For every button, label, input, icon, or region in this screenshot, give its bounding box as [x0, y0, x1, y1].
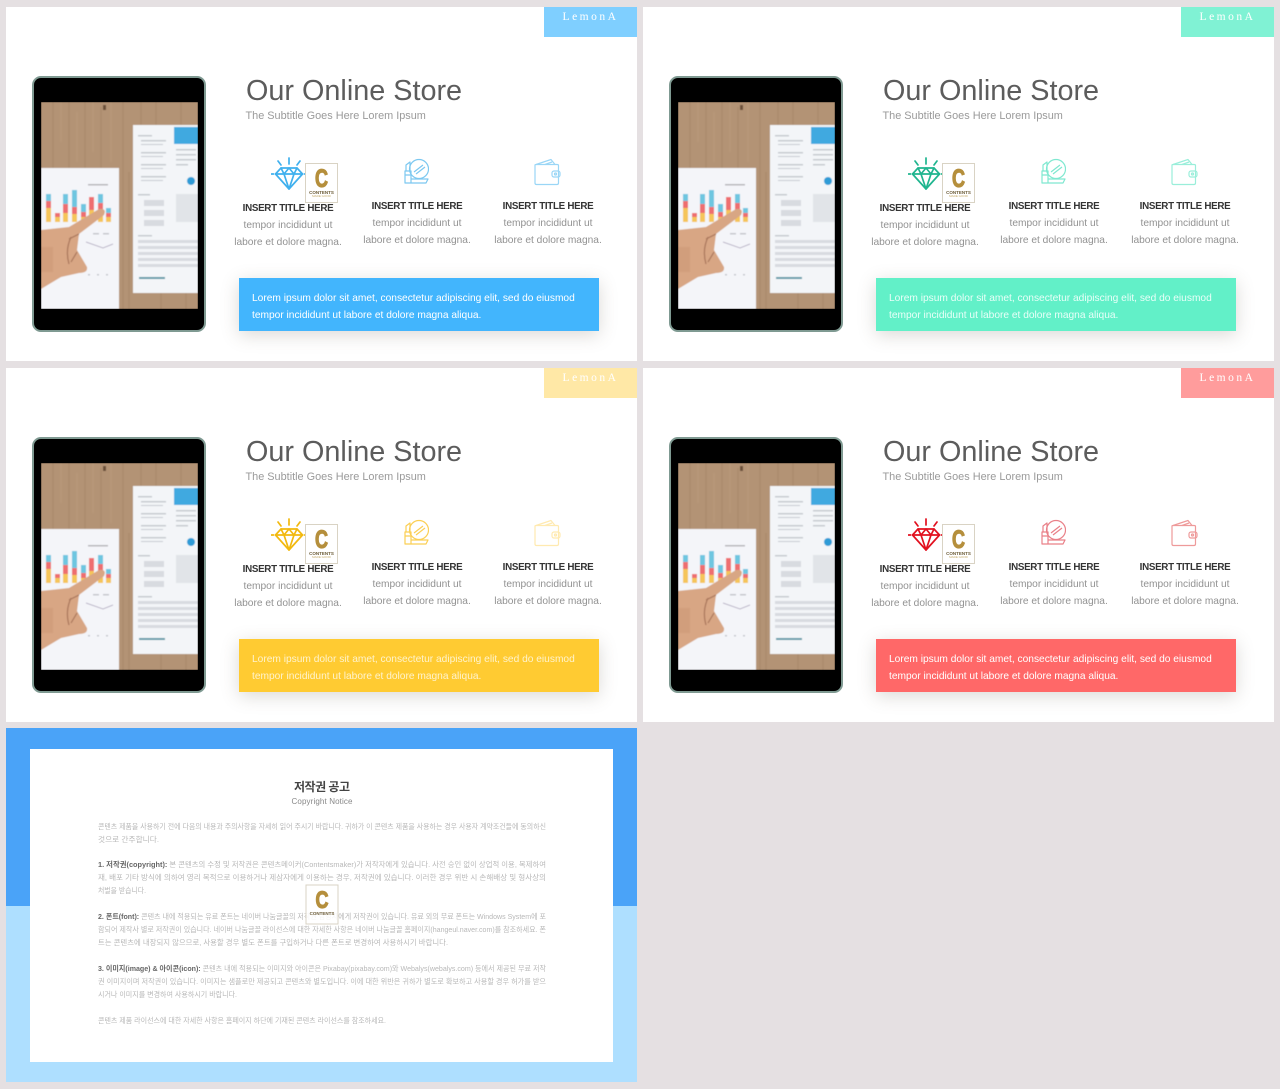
notice body: 콘텐츠 제품 라이선스에 대한 자세한 사항은 홈페이지 하단에 기재된 콘텐츠 라이선스를 참조하세요. [98, 1015, 386, 1025]
callout [876, 278, 1236, 331]
column 2 text [363, 562, 471, 607]
tag: LemonA [1181, 368, 1274, 398]
column 1 text [234, 564, 342, 609]
column 1 text: labore et dolore magna. [234, 237, 342, 248]
watermark: CONTENTS [310, 911, 334, 916]
icon: diamond [271, 157, 305, 190]
panel: copyright notice [6, 728, 637, 1082]
tablet photo [32, 76, 206, 332]
tag: LemonA: LemonA [1200, 372, 1255, 384]
column 3 text: tempor incididunt ut [504, 218, 592, 229]
tag: LemonA: LemonA [563, 372, 618, 384]
watermark: MADE GOOD [312, 555, 331, 559]
watermark: MADE GOOD [312, 194, 331, 198]
watermark: CONTENTS [946, 551, 971, 556]
column 1 text: INSERT TITLE HERE [880, 203, 970, 214]
callout: Lorem ipsum dolor sit amet, consectetur adipiscing elit, sed do eiusmod [889, 654, 1212, 665]
watermark: C [315, 165, 328, 193]
notice body: 함되어 제작사 별로 저작권이 있습니다. 네이버 나눔글꼴 라이선스에 대한 자세한 사항은 네이버 나눔글꼴 홈페이지(hangeul.naver.com)를 참조하세요. 폰 [98, 924, 546, 934]
watermark: C [952, 165, 965, 193]
notice body: 재, 배포 기타 방식에 의하여 영리 목적으로 이용하거나 제삼자에게 이용하는 경우, 저작권에 있습니다. 이러한 경우 위반 시 손해배상 및 형사상의 [98, 872, 546, 882]
callout: tempor incididunt ut labore et dolore magna aliqua. [889, 671, 1118, 682]
notice body: 트는 콘텐츠에 내장되지 않으므로, 사용할 경우 별도 폰트를 구입하거나 다른 폰트로 변경하여 사용하시기 바랍니다. [98, 937, 448, 947]
notice body: 2. 폰트(font): 콘텐츠 내에 적용되는 유료 폰트는 네이버 나눔글꼴의 저작권 담당자에게 저작권이 있습니다. 유료 외의 무료 폰트는 Windows System에 포 [98, 911, 546, 921]
column 1 text: labore et dolore magna. [871, 598, 979, 609]
callout: tempor incididunt ut labore et dolore magna aliqua. [889, 310, 1118, 321]
tablet photo [669, 76, 843, 332]
icon: lipstick and mirror [1041, 158, 1066, 184]
column 3 text [1131, 562, 1239, 607]
column 1 text [871, 564, 979, 609]
heading: Our Online Store [883, 75, 1099, 107]
icon: diamond [271, 518, 305, 551]
watermark: CONTENTS [309, 190, 334, 195]
column 1 text: labore et dolore magna. [234, 598, 342, 609]
notice body: 것으로 간주합니다. [98, 834, 159, 844]
column 2 text: labore et dolore magna. [363, 235, 471, 246]
column 1 text: tempor incididunt ut [244, 581, 332, 592]
callout [876, 639, 1236, 692]
panel: green slide [643, 7, 1274, 361]
column 3 text: labore et dolore magna. [494, 235, 602, 246]
callout: tempor incididunt ut labore et dolore magna aliqua. [252, 310, 481, 321]
tag: LemonA [544, 7, 637, 37]
column 1 text [871, 203, 979, 248]
column 3 text [1131, 201, 1239, 246]
icon: lipstick and mirror [404, 158, 429, 184]
column 3 text: labore et dolore magna. [494, 596, 602, 607]
tablet photo [32, 437, 206, 693]
icon: diamond [908, 518, 942, 551]
column 3 text: INSERT TITLE HERE [1140, 562, 1230, 573]
watermark [942, 524, 975, 564]
panel: red slide [643, 368, 1274, 722]
column 3 text [494, 201, 602, 246]
column 1 text: labore et dolore magna. [871, 237, 979, 248]
column 1 text: tempor incididunt ut [881, 220, 969, 231]
column 3 text: INSERT TITLE HERE [503, 562, 593, 573]
notice body: 1. 저작권(copyright): 본 콘텐츠의 수정 및 저작권은 콘텐츠메이커(Contentsmaker)가 저작자에게 있습니다. 사전 승인 없이 상업적 이용, 복제하여 [98, 859, 546, 869]
notice subtitle: Copyright Notice [292, 797, 353, 806]
column 3 text: labore et dolore magna. [1131, 596, 1239, 607]
column 1 text: INSERT TITLE HERE [243, 564, 333, 575]
icon: lipstick and mirror [1041, 520, 1066, 545]
column 2 text: labore et dolore magna. [1000, 235, 1108, 246]
column 3 text: tempor incididunt ut [1141, 579, 1229, 590]
subtitle: The Subtitle Goes Here Lorem Ipsum [246, 110, 426, 122]
column 3 text: labore et dolore magna. [1131, 235, 1239, 246]
column 1 text [234, 203, 342, 248]
column 2 text: INSERT TITLE HERE [1009, 562, 1099, 573]
callout: Lorem ipsum dolor sit amet, consectetur adipiscing elit, sed do eiusmod [889, 293, 1212, 304]
watermark [305, 163, 338, 203]
notice title: 저작권 공고 [294, 779, 350, 794]
callout: Lorem ipsum dolor sit amet, consectetur adipiscing elit, sed do eiusmod [252, 654, 575, 665]
icon: wallet [1171, 520, 1198, 546]
subtitle: The Subtitle Goes Here Lorem Ipsum [246, 470, 426, 482]
panel: yellow slide [6, 368, 637, 722]
watermark: C [952, 526, 965, 554]
notice body: 3. 이미지(image) & 아이콘(icon): 콘텐츠 내에 적용되는 이미지와 아이콘은 Pixabay(pixabay.com)와 Webalys(webalys.com) 등에서 제공된 무료 저작 [98, 963, 546, 973]
tag: LemonA: LemonA [563, 11, 618, 23]
icon: wallet [534, 158, 561, 186]
column 2 text: INSERT TITLE HERE [372, 201, 462, 212]
icon: wallet [534, 520, 561, 546]
column 2 text: tempor incididunt ut [373, 218, 461, 229]
watermark [305, 524, 338, 564]
subtitle: The Subtitle Goes Here Lorem Ipsum [882, 470, 1063, 482]
column 3 text: tempor incididunt ut [504, 579, 592, 590]
watermark: MADE GOOD [949, 194, 968, 198]
column 2 text: labore et dolore magna. [1000, 596, 1108, 607]
column 3 text: tempor incididunt ut [1141, 218, 1229, 229]
column 2 text: INSERT TITLE HERE [1009, 201, 1099, 212]
callout [239, 639, 599, 692]
tag: LemonA [1181, 7, 1274, 37]
column 2 text: tempor incididunt ut [373, 579, 461, 590]
column 3 text: INSERT TITLE HERE [503, 201, 593, 212]
heading: Our Online Store [246, 75, 462, 107]
column 1 text: tempor incididunt ut [244, 220, 332, 231]
notice body: 콘텐츠 제품을 사용하기 전에 다음의 내용과 주의사항을 자세히 읽어 주시기 바랍니다. 귀하가 이 콘텐츠 제품을 사용하는 경우 사용자 계약조건들에 동의하신 [98, 821, 546, 831]
watermark: C [315, 526, 328, 554]
callout [239, 278, 599, 331]
tag: LemonA: LemonA [1200, 11, 1255, 23]
watermark: CONTENTS [309, 551, 334, 556]
notice body: 시거나 이미지를 변경하여 사용하시기 바랍니다. [98, 989, 237, 999]
watermark: C [316, 887, 328, 914]
heading: Our Online Store [246, 436, 462, 468]
callout: Lorem ipsum dolor sit amet, consectetur adipiscing elit, sed do eiusmod [252, 293, 575, 304]
column 2 text: tempor incididunt ut [1010, 579, 1098, 590]
column 1 text: INSERT TITLE HERE [880, 564, 970, 575]
column 2 text [363, 201, 471, 246]
column 2 text: tempor incididunt ut [1010, 218, 1098, 229]
column 2 text: labore et dolore magna. [363, 596, 471, 607]
icon: diamond [908, 157, 942, 190]
heading: Our Online Store [883, 436, 1099, 468]
watermark [942, 163, 975, 203]
watermark: CONTENTS [946, 190, 971, 195]
panel: blue slide [6, 7, 637, 361]
column 1 text: INSERT TITLE HERE [243, 203, 333, 214]
tablet photo [669, 437, 843, 693]
watermark: MADE GOOD [949, 555, 968, 559]
notice body: 처벌을 받습니다. [98, 885, 146, 895]
callout: tempor incididunt ut labore et dolore magna aliqua. [252, 671, 481, 682]
subtitle: The Subtitle Goes Here Lorem Ipsum [882, 110, 1063, 122]
column 2 text: INSERT TITLE HERE [372, 562, 462, 573]
icon: wallet [1171, 158, 1198, 186]
column 2 text [1000, 562, 1108, 607]
notice body: 권 이미지이며 저작권이 있습니다. 이미지는 샘플로만 제공되고 콘텐츠와 별도입니다. 이에 대한 위반은 귀하가 별도로 확보하고 사용할 경우 허가를 받으 [98, 976, 546, 986]
tag: LemonA [544, 368, 637, 398]
icon: lipstick and mirror [404, 520, 429, 545]
watermark [306, 885, 338, 924]
column 3 text [494, 562, 602, 607]
column 2 text [1000, 201, 1108, 246]
column 3 text: INSERT TITLE HERE [1140, 201, 1230, 212]
notice body [98, 821, 546, 1025]
column 1 text: tempor incididunt ut [881, 581, 969, 592]
